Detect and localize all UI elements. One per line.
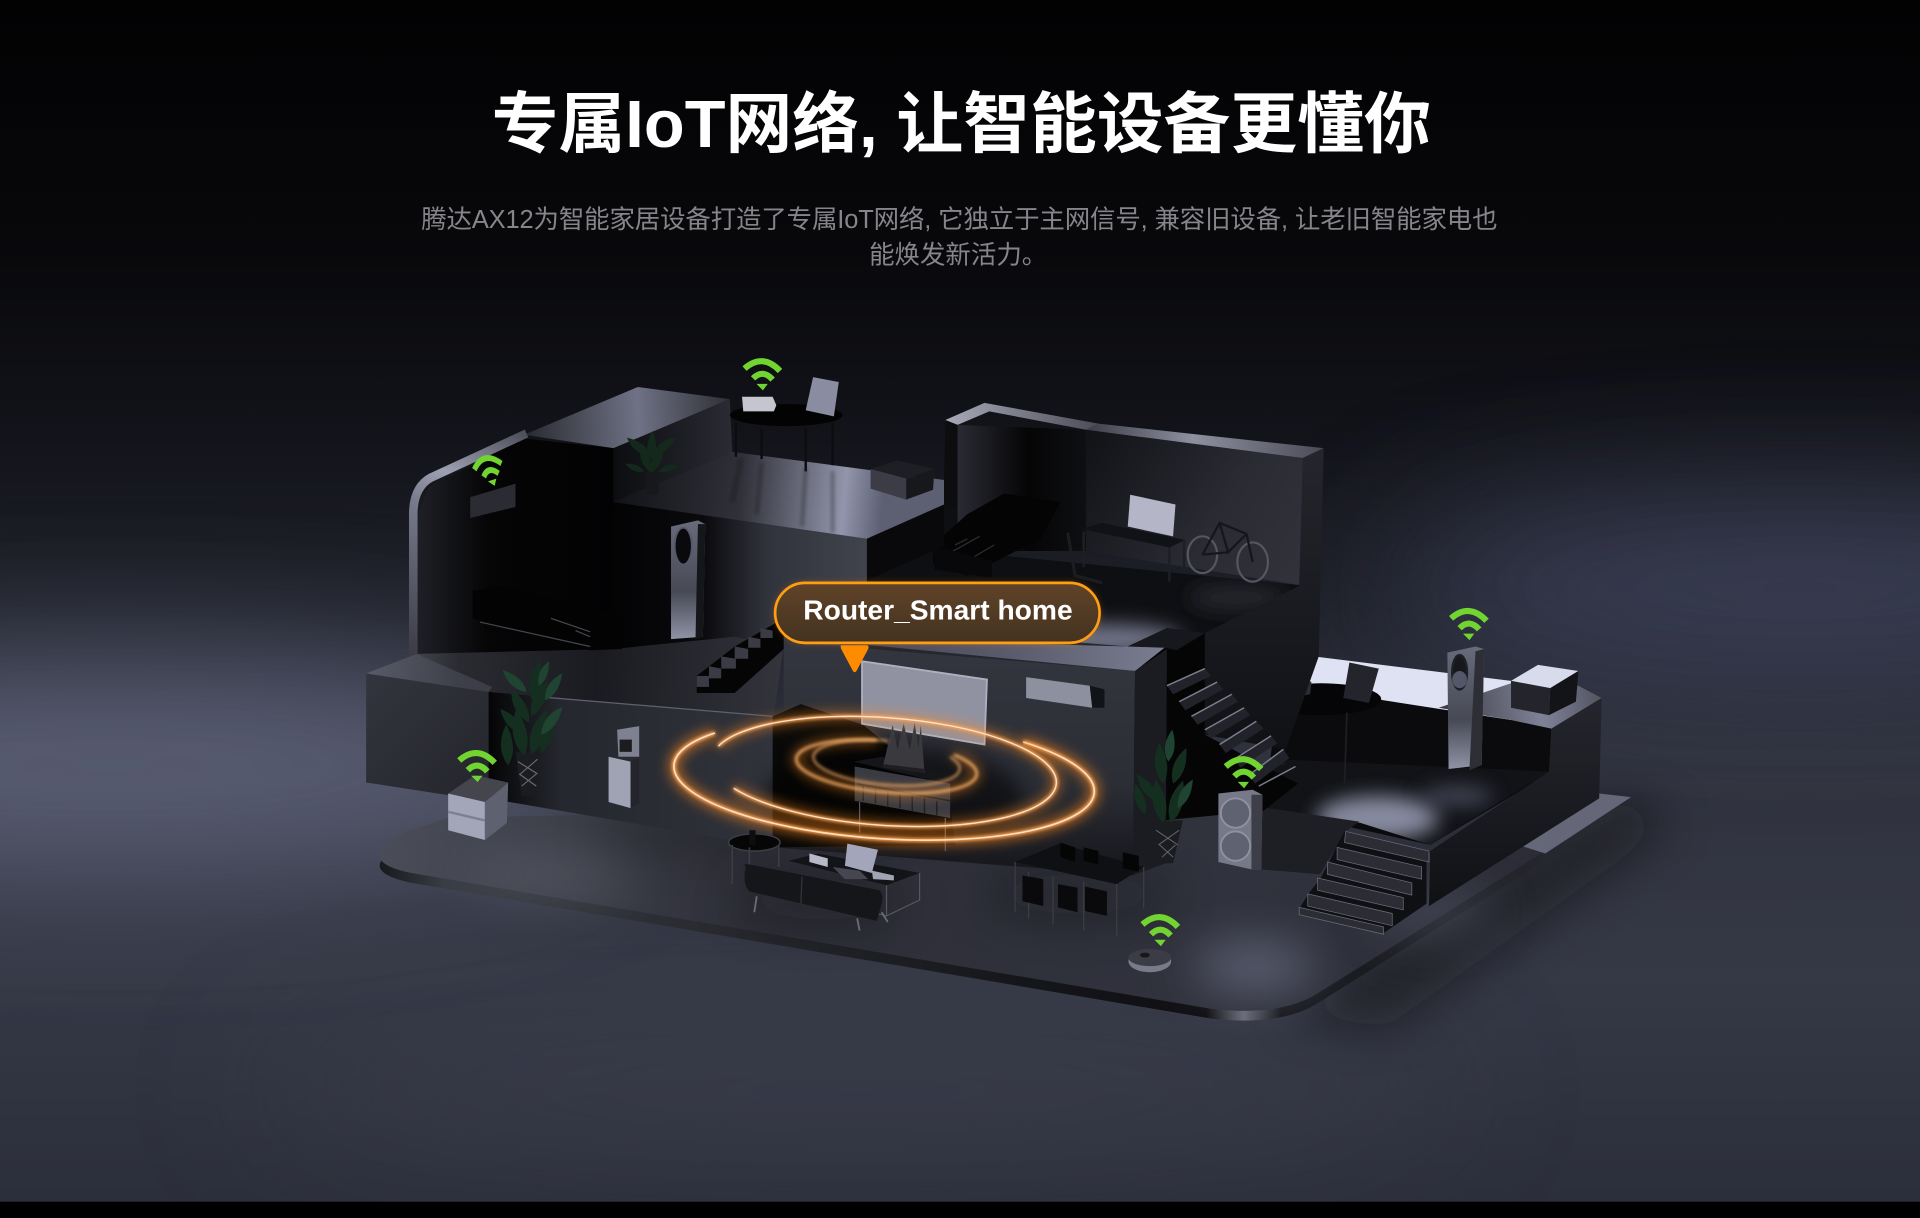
wifi icon: printer — [459, 753, 495, 781]
washer — [1218, 790, 1262, 869]
left box wall — [366, 654, 773, 847]
router — [883, 722, 924, 773]
left wall air conditioner — [470, 484, 516, 518]
coffee table with laptop — [789, 844, 920, 916]
right desk set — [1261, 662, 1381, 784]
title: 专属IoT网络, 让智能设备更懂你 — [492, 88, 1431, 162]
robot vacuum — [1128, 949, 1171, 972]
signal rings — [670, 705, 1098, 852]
dark router alcove — [765, 704, 1022, 847]
small stairs — [697, 618, 784, 693]
storage box — [871, 460, 934, 500]
upper left building — [366, 387, 958, 722]
wifi icon: left air conditioner — [472, 454, 507, 489]
wall air conditioner — [1026, 677, 1104, 708]
white box on platform — [1511, 665, 1578, 715]
bicycle — [1188, 523, 1268, 582]
router callout bubble — [775, 583, 1100, 643]
upper right room walls — [857, 403, 1324, 749]
subtitle — [421, 206, 1498, 269]
wifi icon: robot vacuum — [1142, 917, 1178, 945]
subtitle: 腾达AX12为智能家居设备打造了专属IoT网络, 它独立于主网信号, 兼容旧设备, 让老旧智能家电也 — [421, 206, 1498, 234]
plant: right of block — [1130, 729, 1196, 863]
water dispenser — [609, 726, 639, 808]
central block with staircase — [773, 628, 1298, 876]
right tower appliance — [1447, 647, 1484, 770]
ground shadow — [1286, 796, 1671, 1029]
wifi icon: top table — [744, 361, 780, 389]
wall TV — [862, 661, 987, 744]
plant: lower left — [496, 660, 566, 796]
callout pointer — [841, 645, 869, 672]
floor slab — [380, 793, 1631, 1021]
wifi icon: washer — [1226, 759, 1261, 787]
dining table — [1015, 842, 1144, 937]
right platform — [1261, 651, 1602, 906]
living room side table — [729, 830, 780, 891]
left room air purifier — [671, 520, 705, 639]
upper table with speaker and panel — [730, 377, 842, 471]
bed, upper right room — [933, 493, 1060, 578]
wifi icon: tower — [1451, 611, 1487, 639]
printer appliance — [448, 775, 508, 840]
console cabinet — [853, 757, 950, 851]
subtitle: 能焕发新活力。 — [869, 241, 1047, 269]
sofa — [744, 864, 888, 931]
bed, left room — [473, 587, 626, 650]
router callout bubble: Router_Smart home — [803, 595, 1073, 626]
plant: top room — [624, 431, 679, 495]
front steps — [1299, 831, 1430, 934]
desk, monitor and chair — [1068, 495, 1185, 583]
